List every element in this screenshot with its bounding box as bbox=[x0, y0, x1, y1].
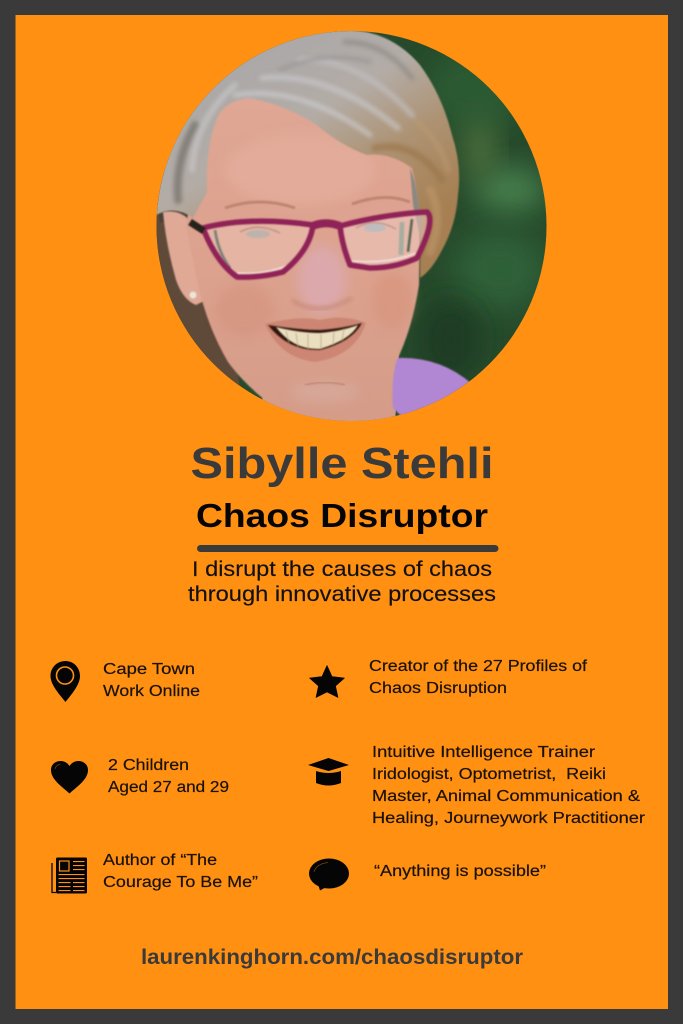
text: author: Author of “The bbox=[103, 852, 217, 869]
foliage backdrop bbox=[150, 25, 550, 425]
text: creator: Chaos Disruption bbox=[369, 680, 507, 697]
text: author bbox=[103, 852, 258, 891]
glasses bbox=[190, 212, 430, 277]
neck and lower face bbox=[262, 354, 399, 421]
text: qualifications: Intuitive Intelligence Trainer bbox=[372, 744, 595, 761]
icon: heart bbox=[51, 761, 88, 794]
icon: speech bubble bbox=[309, 858, 349, 890]
tagline: through innovative processes bbox=[188, 583, 496, 606]
ear bbox=[163, 211, 206, 305]
text: qualifications: Iridologist, Optometrist, Reiki bbox=[372, 766, 606, 783]
teeth bbox=[276, 325, 358, 349]
back hair and left side bbox=[156, 178, 240, 386]
name heading: Sibylle Stehli bbox=[190, 439, 494, 488]
tagline: I disrupt the causes of chaos bbox=[192, 558, 492, 581]
lips bbox=[265, 318, 366, 362]
text: children: Aged 27 and 29 bbox=[108, 779, 229, 796]
face bbox=[186, 85, 420, 425]
text: qualifications: Healing, Journeywork Practitioner bbox=[372, 810, 645, 827]
face shading bbox=[234, 154, 366, 198]
eyebrows and eyes bbox=[225, 197, 410, 238]
icon: star bbox=[310, 666, 344, 698]
tagline bbox=[188, 558, 496, 606]
text: location bbox=[103, 661, 200, 700]
gray temple hair bbox=[410, 168, 421, 240]
text: location: Cape Town bbox=[103, 661, 195, 678]
text: qualifications: Master, Animal Communication & bbox=[372, 788, 641, 805]
text: quote: “Anything is possible” bbox=[374, 863, 546, 880]
lens reflections bbox=[203, 212, 430, 277]
text: children bbox=[108, 757, 229, 796]
footer link: laurenkinghorn.com/chaosdisruptor bbox=[141, 946, 523, 969]
portrait photo bbox=[150, 25, 550, 425]
icon: graduation cap bbox=[308, 758, 349, 786]
text: author: Courage To Be Me” bbox=[103, 874, 258, 891]
hair strands bbox=[178, 42, 448, 252]
nose bbox=[292, 298, 352, 309]
text: children: 2 Children bbox=[108, 757, 189, 774]
earring bbox=[190, 292, 196, 298]
divider under title bbox=[197, 545, 498, 552]
mouth interior bbox=[268, 323, 362, 350]
icon: newspaper bbox=[52, 858, 87, 894]
job title: Chaos Disruptor bbox=[196, 497, 488, 534]
text: location: Work Online bbox=[103, 683, 200, 700]
top hair bbox=[156, 30, 459, 278]
chin crease bbox=[305, 382, 345, 385]
tooth gaps bbox=[286, 329, 344, 349]
text: creator: Creator of the 27 Profiles of bbox=[369, 658, 588, 675]
text: creator bbox=[369, 658, 588, 697]
icon: location pin bbox=[50, 661, 80, 702]
text: qualifications bbox=[372, 744, 645, 827]
purple shirt bbox=[392, 358, 472, 420]
